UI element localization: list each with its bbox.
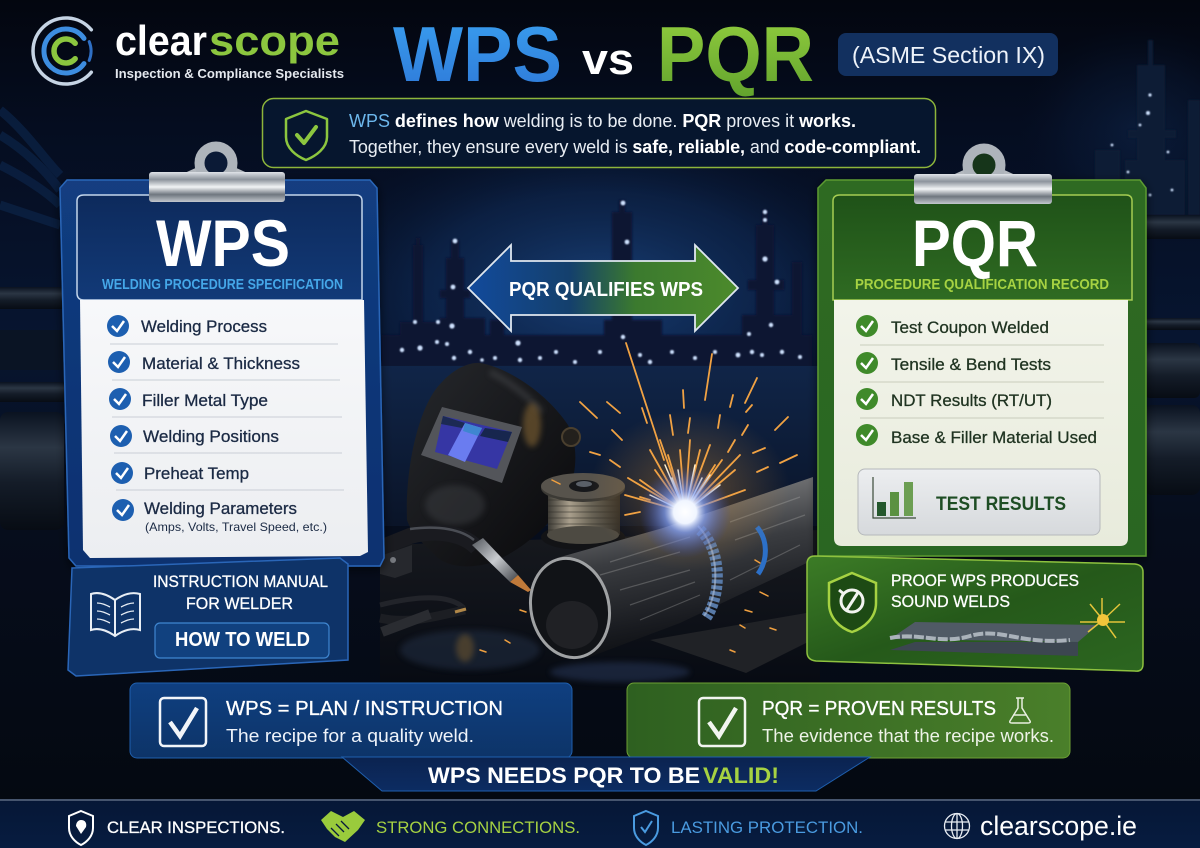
box: WPS = plan: The recipe for a quality weld. [226, 726, 474, 746]
arrow: PQR qualifies WPS: PQR QUALIFIES WPS [509, 279, 703, 301]
icon: steel pipe with weld [521, 477, 813, 665]
box: PQR = results: The evidence that the recipe works. [762, 726, 1054, 746]
callout: summary: WPS defines how welding is to be done. PQR proves it works. [349, 111, 856, 131]
logo: clear [115, 17, 207, 64]
item: Welding Positions [110, 425, 279, 447]
icon: welding helmet [407, 363, 580, 566]
icon: weld spark [1080, 598, 1125, 638]
heading panel: PQR: PQR [912, 206, 1038, 280]
icon: welded metal plates [890, 622, 1098, 656]
item: Filler Metal Type: Filler Metal Type [142, 391, 268, 410]
logo: Inspection & Compliance Specialists [115, 66, 344, 81]
city lights [400, 93, 1173, 364]
item: Welding Positions: Welding Positions [143, 427, 279, 446]
heading panel: WPS: WELDING PROCEDURE SPECIFICATION [102, 276, 343, 293]
footer bar: LASTING PROTECTION. [671, 818, 863, 837]
icon: white shield [69, 811, 93, 845]
icon: flask [1010, 698, 1030, 723]
item: Welding Process: Welding Process [141, 317, 267, 336]
icon: open book [91, 593, 140, 636]
steel plate [650, 612, 812, 673]
icon: blue shield [634, 811, 658, 845]
item: Tensile & Bend Tests: Tensile & Bend Tests [891, 355, 1051, 374]
logo [33, 17, 344, 84]
heading panel: PQR: PROCEDURE QUALIFICATION RECORD [855, 276, 1109, 293]
box: WPS = plan [130, 683, 572, 758]
box: PQR = results: PQR = PROVEN RESULTS [762, 698, 996, 720]
footer bar [0, 799, 1200, 848]
water reflection [380, 366, 820, 526]
item: Tensile & Bend Tests [856, 352, 1051, 374]
arrow: PQR qualifies WPS [468, 245, 738, 331]
item: Preheat Temp [111, 462, 249, 484]
box: WPS = plan: WPS = PLAN / INSTRUCTION [226, 698, 503, 720]
icon: logo rings [33, 18, 91, 84]
panel: instruction manual [68, 558, 348, 676]
item: Welding Parameters: Welding Parameters [144, 499, 297, 518]
item: NDT Results: NDT Results (RT/UT) [891, 391, 1052, 410]
panel: PQR clipboard [818, 148, 1146, 556]
panel: proof: SOUND WELDS [891, 592, 1010, 611]
panel: instruction manual: FOR WELDER [186, 594, 293, 613]
icon: welding torch and cables [380, 528, 531, 632]
panel: proof [807, 556, 1143, 671]
callout: summary: Together, they ensure every weld is safe, reliable, and code-compliant. [349, 137, 921, 157]
heading panel: WPS: WPS [156, 206, 290, 280]
icon: shield with inspection symbol [829, 573, 876, 632]
title: PQR [657, 10, 814, 98]
button: how to weld: HOW TO WELD [175, 629, 310, 651]
card: test results [858, 469, 1100, 535]
sparks [480, 343, 797, 652]
icon: clipboard clip [914, 148, 1052, 204]
icon: wire spool [541, 473, 625, 550]
item: Base & Filler Material Used: Base & Filler Material Used [891, 428, 1097, 447]
card: test results: TEST RESULTS [936, 494, 1066, 515]
title: WPS [393, 10, 562, 98]
bar chart icon [873, 477, 916, 518]
heading panel: PQR [833, 195, 1132, 300]
item: Material & Thickness: Material & Thickness [142, 354, 300, 373]
icon: shield check [286, 111, 327, 160]
workshop floor [380, 530, 820, 690]
panel: proof: PROOF WPS PRODUCES [891, 571, 1079, 590]
item: Welding Process [107, 315, 267, 337]
panel: WPS clipboard [60, 146, 384, 566]
heading panel: WPS [77, 195, 362, 300]
item: Welding Parameters [112, 499, 327, 534]
banner: WPS needs PQR: VALID! [703, 763, 779, 788]
title: vs [582, 35, 634, 84]
item: Test Coupon Welded: Test Coupon Welded [891, 318, 1049, 337]
icon: checkbox [699, 698, 745, 746]
logo: scope [209, 17, 340, 64]
icon: checkbox [160, 698, 206, 746]
item: Welding Parameters: (Amps, Volts, Travel Speed, etc.) [145, 520, 327, 534]
icon: clipboard clip [149, 146, 285, 202]
faint curved bands top left [0, 110, 60, 225]
banner: WPS needs PQR: WPS NEEDS PQR TO BE [428, 763, 700, 788]
checklist sheet: PQR [834, 300, 1128, 546]
icon: handshake [321, 811, 365, 842]
item: Filler Metal Type [109, 388, 268, 410]
footer bar: STRONG CONNECTIONS. [376, 818, 580, 837]
badge: ASME Section IX: (ASME Section IX) [852, 42, 1045, 68]
footer bar: clearscope.ie [980, 811, 1137, 841]
banner: WPS needs PQR [342, 757, 870, 791]
checklist sheet: WPS [80, 300, 368, 558]
item: Preheat Temp: Preheat Temp [144, 464, 249, 483]
industrial pipes left and right [0, 215, 1200, 530]
box: PQR = results [627, 683, 1070, 758]
panel: instruction manual: INSTRUCTION MANUAL [153, 572, 328, 591]
title [393, 10, 814, 98]
icon: globe [944, 813, 970, 839]
refinery silhouette [382, 200, 812, 367]
callout: summary [262, 98, 936, 168]
footer bar: CLEAR INSPECTIONS. [107, 818, 285, 837]
distant refinery right [1095, 40, 1200, 215]
badge: ASME Section IX [838, 33, 1058, 76]
button: how to weld [155, 623, 329, 658]
